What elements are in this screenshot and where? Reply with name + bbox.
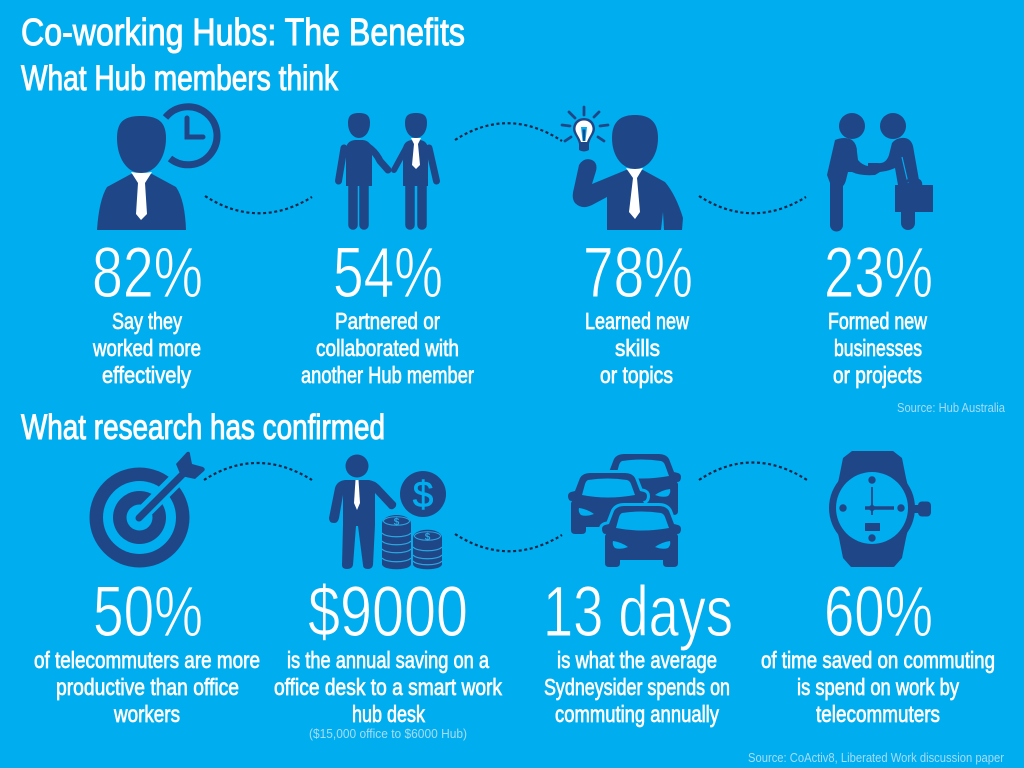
label: of telecommuters are more productive: workers [113, 701, 180, 727]
arrow: dotted connector 1 [205, 196, 312, 213]
arrow: dotted connector 5 [455, 534, 562, 551]
label: sydneysider commuting [544, 647, 730, 727]
panel: 50% telecommuters [34, 452, 260, 727]
stat: 50%: 50% [93, 573, 203, 652]
icon: wristwatch [829, 451, 931, 567]
arrow: dotted connector 4 [204, 463, 312, 480]
panel: $9000 saving [274, 454, 502, 741]
icon: coin stack small: $ [425, 532, 431, 543]
icon: lightbulb [562, 107, 608, 152]
heading: what hub members think: What Hub members think [21, 59, 338, 98]
label: time saved on commuting: telecommuters [816, 701, 940, 727]
label: formed new businesses [828, 308, 927, 388]
stat: 78%: 78% [583, 234, 693, 313]
label: sydneysider commuting: commuting annually [555, 701, 719, 727]
label: partnered or collaborated [301, 308, 474, 388]
icon: coin stack large: $ [394, 517, 400, 528]
label: learned new skills [585, 308, 689, 388]
label: of telecommuters are more productive [34, 647, 260, 727]
label: formed new businesses: businesses [834, 335, 922, 361]
stat: 13 days: 13 days [543, 573, 733, 652]
panel: 60% time saved [761, 451, 995, 727]
arrow: dotted connector 2 [455, 123, 562, 141]
label: time saved on commuting: is spend on work by [797, 674, 959, 700]
icon: two men shaking hands [338, 113, 436, 225]
panel: 82% worked more effectively [92, 107, 217, 388]
note: office to hub cost: ($15,000 office to $6000 Hub) [309, 727, 467, 741]
label: sydneysider commuting: Sydneysider spends on [544, 674, 730, 700]
arrow: dotted connector 3 [699, 196, 806, 213]
stat: 54%: 54% [333, 234, 443, 313]
source: hub australia: Source: Hub Australia [897, 401, 1005, 415]
arrow: dotted connector 6 [699, 462, 807, 480]
label: of telecommuters are more productive: productive than office [56, 674, 239, 700]
label: learned new skills: skills [615, 335, 660, 361]
icon: man with coins [329, 454, 446, 569]
label: formed new businesses: or projects [833, 362, 922, 388]
label: annual saving [274, 647, 502, 727]
icon: man with clock [97, 107, 217, 230]
stat: $9000: $9000 [308, 573, 468, 652]
icon: man with coins: $ [413, 474, 433, 515]
label: annual saving: hub desk [352, 701, 425, 727]
icon: target with arrow [90, 452, 205, 568]
label: annual saving: office desk to a smart work [274, 674, 502, 700]
label: of telecommuters are more productive: of telecommuters are more [34, 647, 260, 673]
label: say they worked more effectively: worked more [92, 335, 201, 361]
label: partnered or collaborated: another Hub member [301, 362, 474, 388]
label: partnered or collaborated: collaborated with [316, 335, 459, 361]
icon: traffic of cars [568, 454, 681, 567]
label: learned new skills: Learned new [585, 308, 689, 334]
panel: 13 days commuting [543, 454, 733, 727]
stat: 60%: 60% [824, 573, 933, 652]
icon: man with lightbulb [562, 107, 683, 230]
heading: what research has confirmed: What research has confirmed [21, 408, 385, 447]
label: say they worked more effectively: Say they [112, 308, 182, 334]
stat: 82%: 82% [92, 234, 203, 313]
panel: 78% learned [562, 107, 693, 388]
icon: handshake with briefcase [827, 113, 933, 231]
label: partnered or collaborated: Partnered or [335, 308, 440, 334]
label: sydneysider commuting: is what the average [557, 647, 717, 673]
panel: 54% partnered [301, 113, 474, 388]
label: formed new businesses: Formed new [828, 308, 927, 334]
label: learned new skills: or topics [600, 362, 673, 388]
panel: 23% formed businesses [824, 113, 933, 388]
title: Co-working Hubs: The Benefits [21, 12, 465, 54]
label: say they worked more effectively [92, 308, 201, 388]
label: annual saving: is the annual saving on a [287, 647, 489, 673]
label: say they worked more effectively: effectively [102, 362, 191, 388]
stat: 23%: 23% [824, 234, 933, 313]
label: time saved on commuting [761, 647, 995, 727]
